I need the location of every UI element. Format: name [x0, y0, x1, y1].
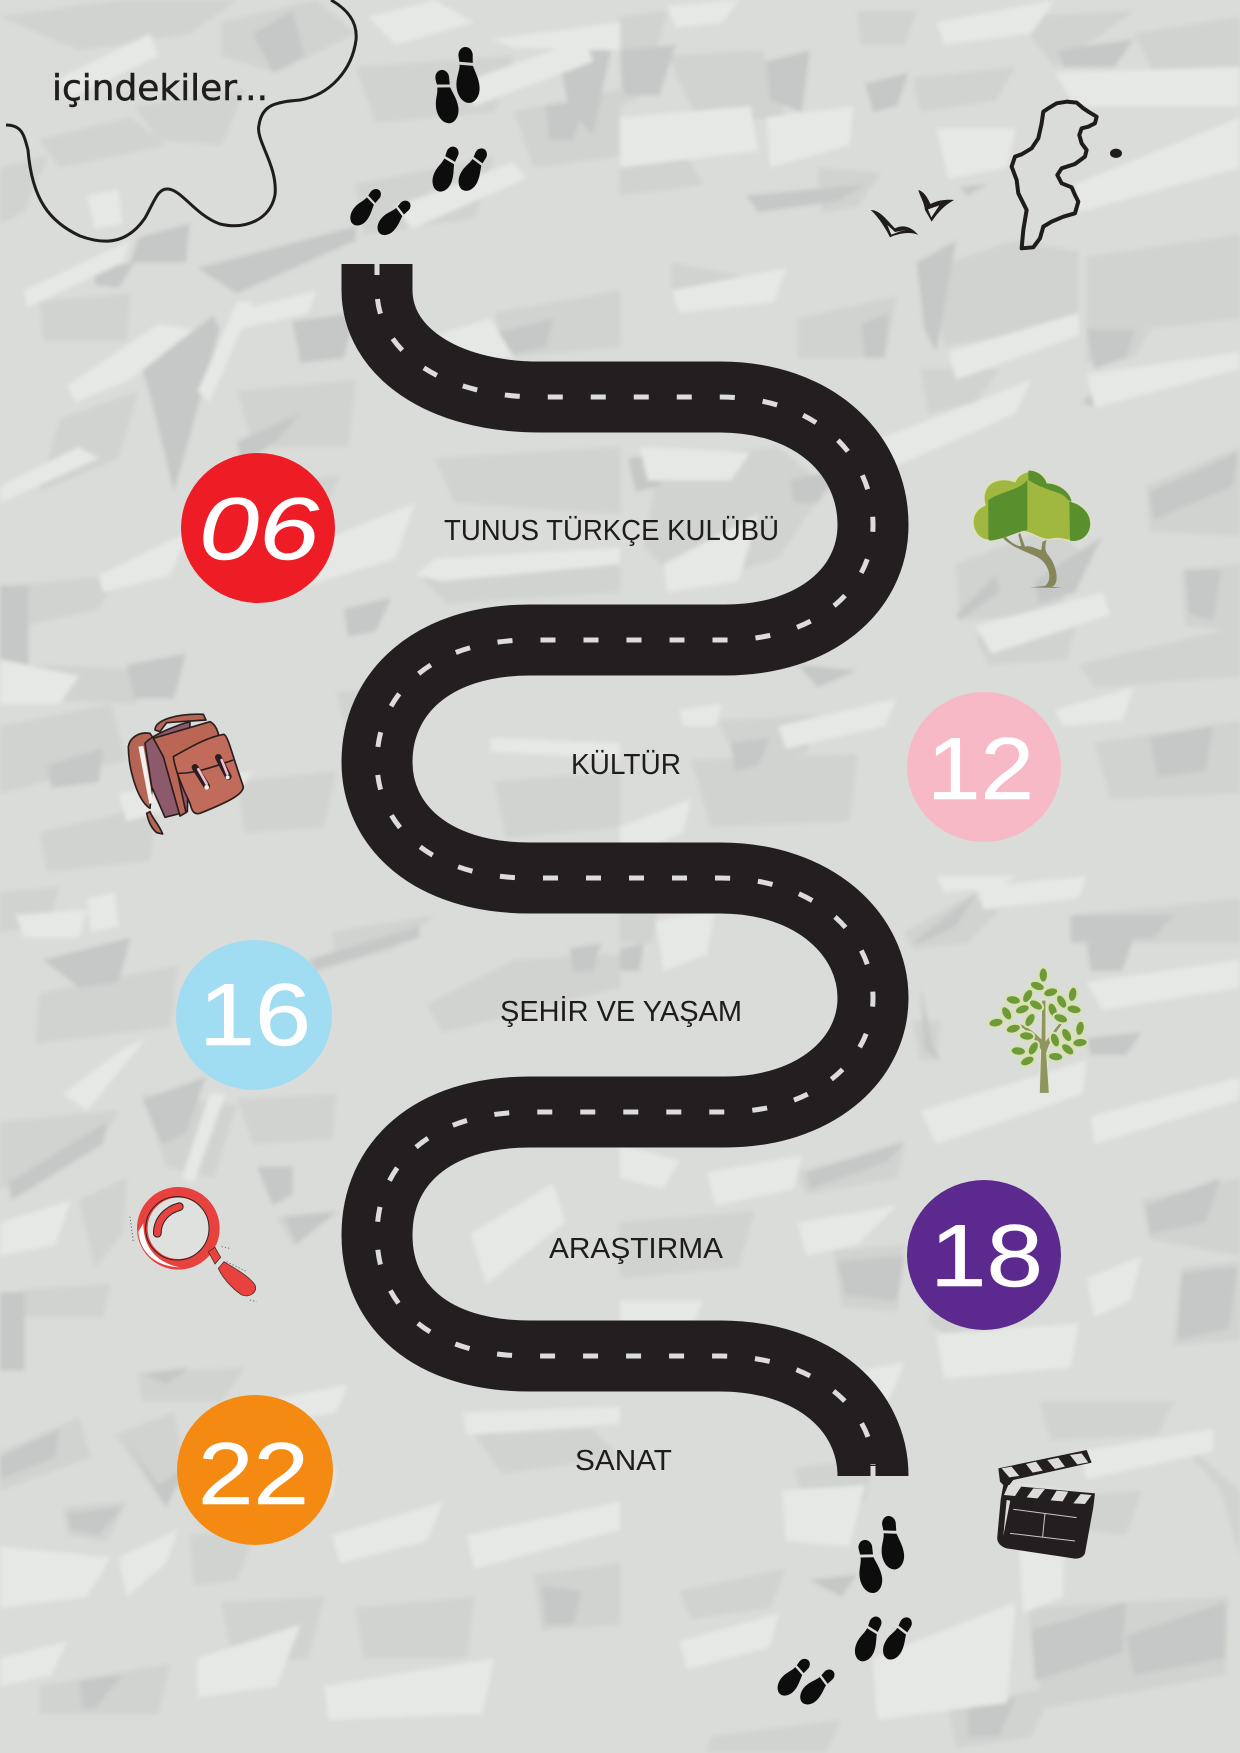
- label: Şehir ve Yaşam: ŞEHİR VE YAŞAM: [500, 995, 742, 1028]
- circle 12: [907, 692, 1061, 842]
- decorative curve around title: [6, 0, 356, 241]
- footprints: top: [346, 46, 493, 239]
- circle 06: [181, 453, 335, 603]
- footprints: bottom: [773, 1515, 917, 1709]
- circle 22: [177, 1395, 333, 1545]
- icon: magnifying glass: [130, 1192, 257, 1302]
- circle 16: 16: [199, 965, 311, 1064]
- circle 18: 18: [930, 1206, 1043, 1305]
- circle 12: 12: [927, 719, 1034, 818]
- road: [377, 264, 873, 1476]
- icon: backpack: [128, 714, 243, 834]
- circle 18: [907, 1180, 1061, 1330]
- icon: tree 2: [988, 967, 1088, 1093]
- label: Araştırma: ARAŞTIRMA: [549, 1233, 724, 1265]
- icon: clapperboard: [997, 1450, 1095, 1559]
- title: içindekiler: içindekiler...: [52, 68, 268, 109]
- label: Tunus Türkçe Kulübü: TUNUS TÜRKÇE KULÜBÜ: [444, 515, 779, 547]
- circle 22: 22: [198, 1424, 309, 1523]
- icon: birds: [871, 190, 954, 237]
- label: Sanat: SANAT: [575, 1445, 672, 1477]
- label: Kültür: KÜLTÜR: [571, 749, 681, 781]
- icon: Tunisia map outline: [1012, 102, 1122, 248]
- circle 06: 06: [199, 479, 319, 578]
- circle 16: [176, 940, 332, 1090]
- icon: tree 1: [973, 471, 1090, 588]
